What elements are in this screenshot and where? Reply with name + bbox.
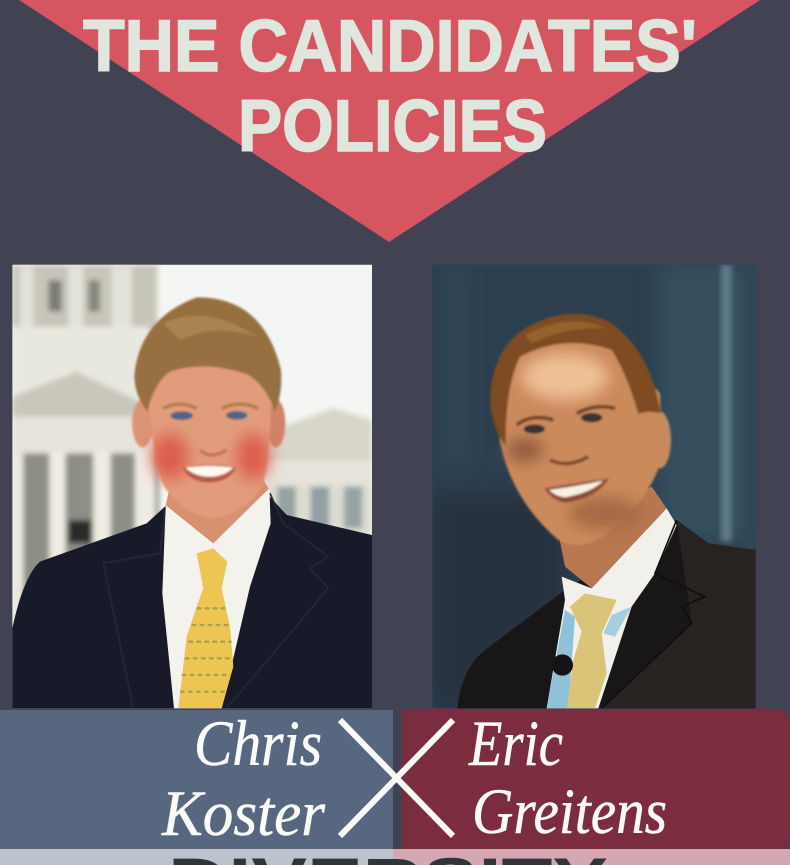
hair bbox=[134, 297, 281, 412]
panel: Eric Greitens name bbox=[402, 710, 790, 849]
tie bbox=[567, 593, 617, 708]
lower strip bbox=[0, 849, 790, 865]
face bbox=[496, 337, 662, 545]
photo: Eric Greitens bbox=[432, 265, 756, 708]
nose bbox=[200, 450, 227, 455]
name: Eric Greitens: Eric bbox=[468, 708, 563, 780]
face bbox=[148, 347, 271, 518]
shirt bbox=[162, 488, 271, 708]
name: Chris Koster bbox=[161, 708, 326, 850]
lapel bbox=[602, 520, 705, 708]
ear bbox=[658, 410, 672, 470]
neck bbox=[166, 480, 269, 543]
header triangle bbox=[19, 0, 760, 242]
title: POLICIES bbox=[238, 86, 547, 167]
smile bbox=[544, 478, 609, 503]
eyes bbox=[170, 411, 193, 420]
versus X bbox=[340, 720, 453, 836]
brows bbox=[163, 404, 258, 408]
name: Eric Greitens bbox=[468, 708, 667, 848]
smile bbox=[183, 464, 236, 483]
name: Chris Koster: Chris bbox=[194, 708, 322, 780]
microphone bbox=[552, 654, 573, 676]
panel: Chris Koster name bbox=[0, 710, 393, 849]
tie bbox=[178, 548, 233, 708]
hair bbox=[490, 314, 661, 447]
suit bbox=[12, 493, 372, 708]
shirt bbox=[547, 508, 677, 708]
suit bbox=[457, 520, 756, 708]
title bbox=[83, 6, 697, 167]
photo: Chris Koster bbox=[12, 265, 372, 708]
neck bbox=[558, 487, 667, 588]
name: Chris Koster: Koster bbox=[161, 778, 326, 850]
lapels bbox=[103, 493, 328, 708]
brows bbox=[517, 407, 615, 425]
eyes bbox=[524, 424, 545, 434]
title: THE CANDIDATES' bbox=[83, 6, 697, 87]
name: Eric Greitens: Greitens bbox=[472, 776, 667, 848]
nose bbox=[550, 457, 588, 463]
ears bbox=[132, 399, 153, 447]
